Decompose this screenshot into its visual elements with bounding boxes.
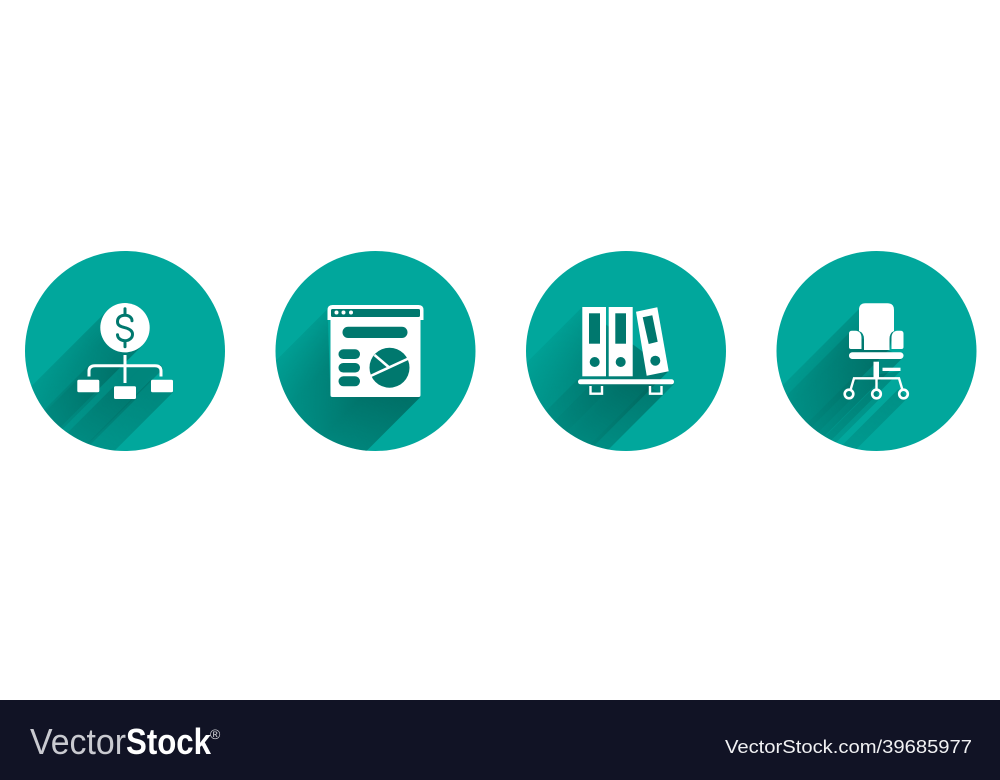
icon badge: browser with pie chart [276, 251, 476, 451]
teal circle [526, 251, 726, 451]
long shadow [782, 309, 907, 449]
white hierarchy icon [77, 303, 173, 399]
long shadow [276, 310, 420, 451]
registered mark: ® [210, 726, 221, 742]
footer bar [0, 700, 1000, 780]
white browser icon [328, 305, 424, 397]
image id: VectorStock.com/39685977 [725, 737, 972, 757]
icon badge: office chair [776, 251, 976, 451]
long shadow [528, 308, 674, 450]
teal circle [25, 251, 225, 451]
white chair icon [845, 303, 908, 398]
white binders icon [578, 307, 674, 394]
long shadow [32, 312, 173, 450]
brand logo text: VectorStock [30, 721, 212, 762]
icon badge: dollar hierarchy [25, 251, 225, 451]
teal circle [776, 251, 976, 451]
teal circle [276, 251, 476, 451]
icon badge: binders on shelf [526, 251, 726, 451]
